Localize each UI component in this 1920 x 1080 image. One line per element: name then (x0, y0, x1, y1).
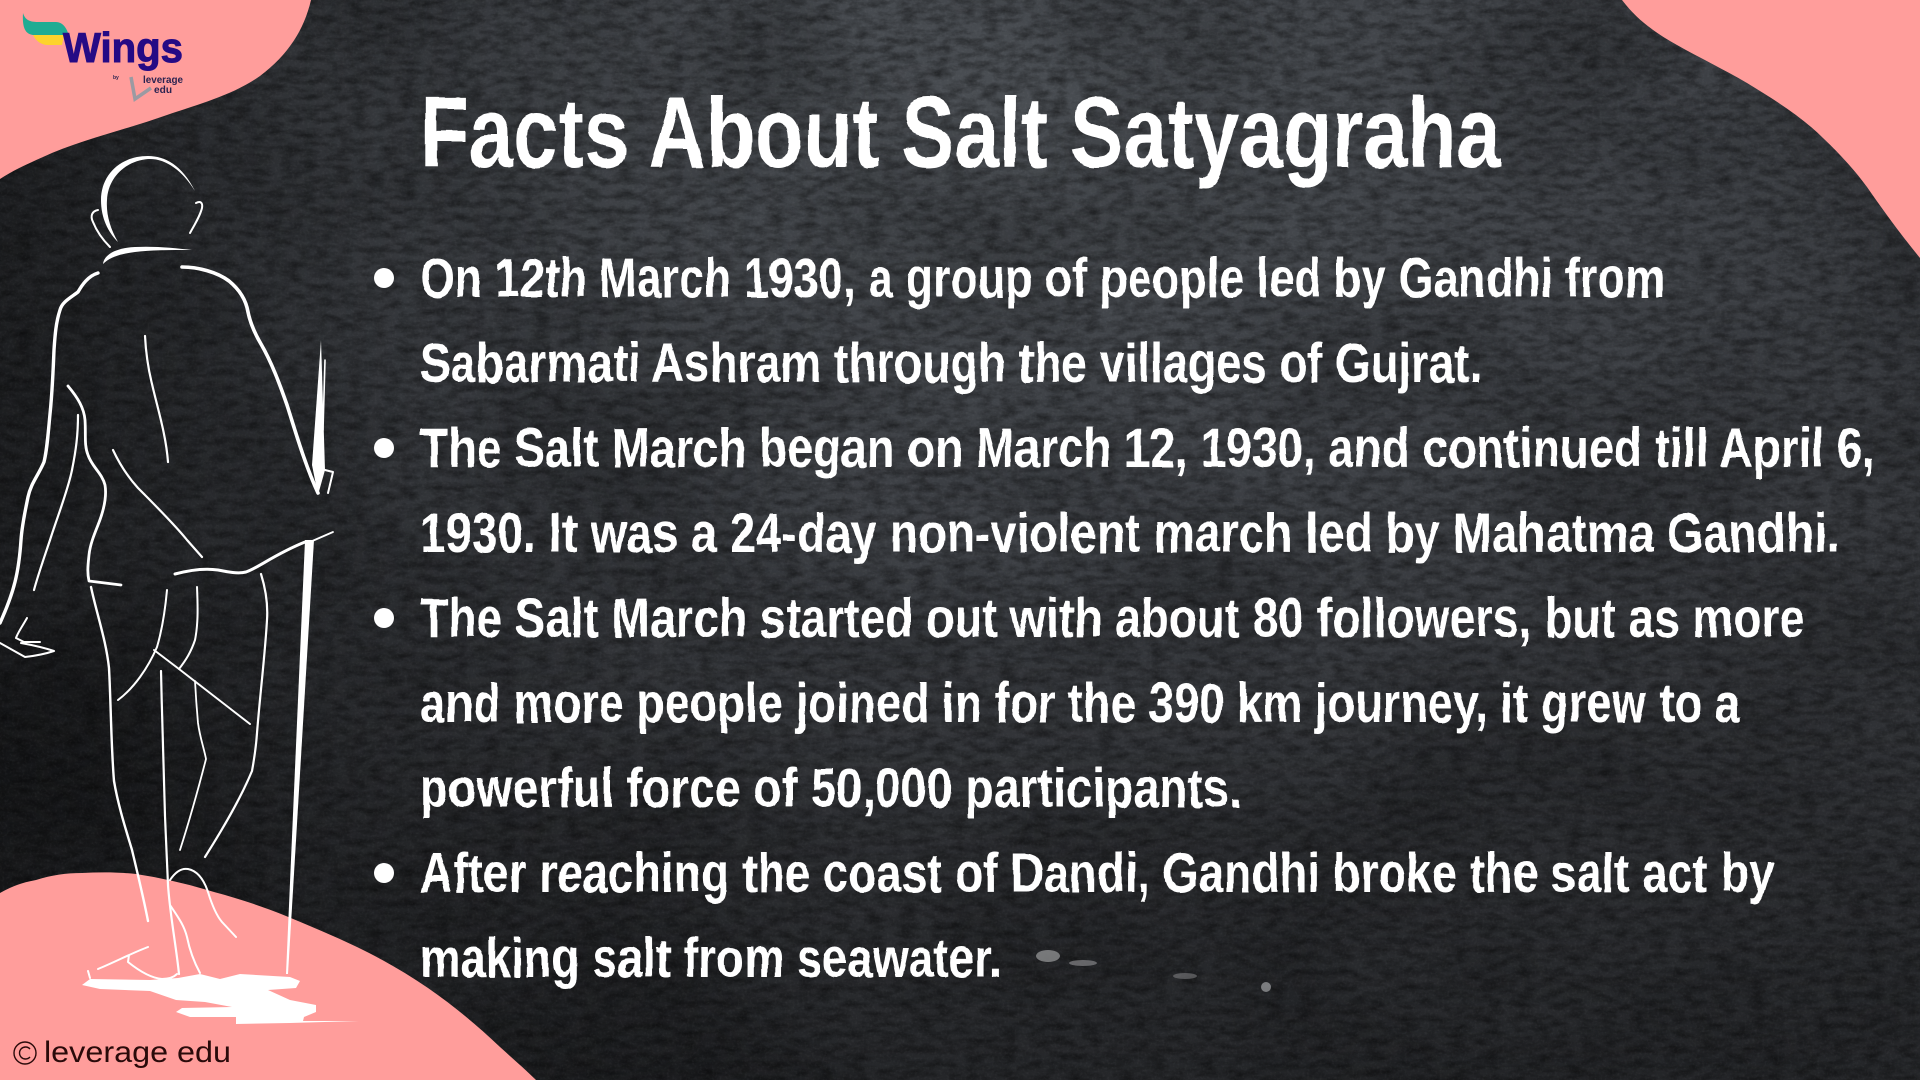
shape: top-left pink corner (0, 0, 311, 179)
ankle (170, 905, 200, 973)
wrist on stick (310, 532, 333, 542)
icon: yellow wing (33, 35, 64, 45)
inner leg (161, 671, 179, 974)
title: Facts About Salt Satyagraha (420, 77, 1502, 189)
robe fold centre (118, 590, 167, 700)
left shoulder and arm (0, 273, 98, 623)
bullet marker 1 (374, 268, 394, 288)
icon: teal wing (23, 13, 68, 35)
side branch of stick (323, 360, 325, 430)
illustration: figure outlines (0, 202, 333, 979)
bullet 3 text (420, 586, 1805, 819)
collar (103, 247, 192, 264)
right leg outer (205, 574, 267, 857)
robe fold right (179, 587, 198, 669)
bullet 1 text (420, 246, 1665, 394)
logo sub-brand line two: edu (154, 85, 172, 96)
ankle loop (170, 869, 236, 937)
bullet 1 text: Sabarmati Ashram through the villages of Gujrat. (420, 331, 1482, 394)
foot (88, 947, 177, 979)
back fold (145, 336, 168, 462)
hand on stick (325, 470, 333, 493)
bullet marker 3 (374, 608, 394, 628)
head (101, 156, 195, 242)
bullet 2 text (420, 416, 1875, 564)
bullet marker 2 (374, 438, 394, 458)
ear (92, 210, 110, 247)
icon: copyright symbol (14, 1042, 36, 1064)
bullet 3 text: powerful force of 50,000 participants. (420, 756, 1242, 819)
shape: bottom-left pink corner (0, 872, 536, 1080)
footer text: leverage edu (44, 1036, 231, 1069)
logo wordmark: Wings (63, 24, 183, 71)
walking stick, upper (312, 340, 325, 495)
bullet 4 text: making salt from seawater. (420, 926, 1002, 989)
illustration: line drawing of Gandhi walking (82, 156, 359, 1024)
left leg outer (91, 587, 148, 921)
face (190, 202, 202, 233)
copyright c (20, 1047, 30, 1059)
walking stick, lower (286, 540, 314, 974)
footer: copyright leverage edu (14, 1036, 231, 1069)
logo byline: by (113, 75, 119, 81)
right shoulder and arm (182, 267, 318, 493)
forearm (34, 415, 78, 590)
cloth across waist (175, 542, 305, 574)
bullet list (374, 246, 1875, 989)
robe fold (113, 450, 202, 557)
logo: Wings by leverage edu (23, 13, 183, 99)
bullet 4 text (420, 841, 1774, 989)
logo sub-brand: leverage (143, 75, 183, 86)
icon: leverage edu mark (131, 77, 151, 99)
shape: top-right pink corner (1622, 0, 1920, 258)
bullet marker 4 (374, 863, 394, 883)
inner arm (68, 386, 121, 585)
calf (180, 681, 206, 850)
robe diagonal (154, 650, 250, 724)
left hand (0, 618, 54, 657)
ground shadow (82, 974, 359, 1024)
